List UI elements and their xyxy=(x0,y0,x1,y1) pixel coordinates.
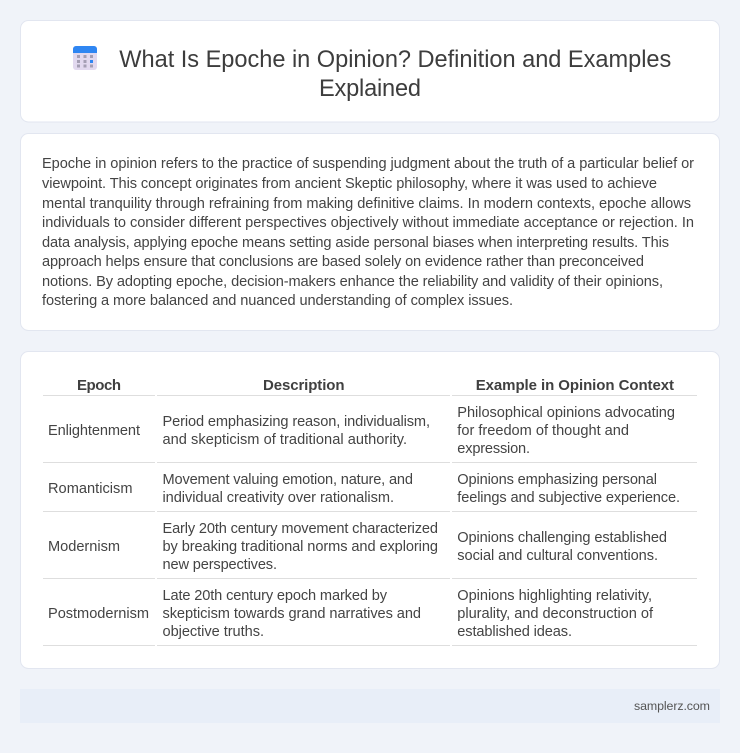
table row: Enlightenment: and skepticism of traditional authority. xyxy=(162,432,407,448)
text block: definition xyxy=(42,156,694,309)
table row: Romanticism: Romanticism xyxy=(48,481,132,497)
text block: definition: notions. By adopting epoche, decision-makers enhance the reliability and validity of their opinions, xyxy=(42,274,663,290)
table row: Modernism: Modernism xyxy=(48,539,120,555)
table row: Postmodernism: plurality, and deconstruction of xyxy=(457,606,654,622)
text block: definition: fostering a more balanced and nuanced understanding of complex issues. xyxy=(42,293,513,309)
title: Explained xyxy=(319,76,421,102)
icon: calendar xyxy=(73,46,97,70)
panel: definition paragraph xyxy=(20,134,720,330)
table row: Postmodernism: objective truths. xyxy=(162,624,264,640)
footer bar xyxy=(20,689,720,723)
table row: Romanticism: Movement valuing emotion, nature, and xyxy=(162,472,413,488)
table row: Romanticism: feelings and subjective experience. xyxy=(457,490,680,506)
text block: definition: mental tranquility through refraining from making definitive claims. In modern contexts, epoche allows xyxy=(42,196,691,212)
table row: Modernism: social and cultural conventions. xyxy=(457,548,658,564)
text block: definition: approach helps ensure that conclusions are based solely on evidence rather than preconceived xyxy=(42,254,644,270)
table row: Enlightenment xyxy=(43,405,697,463)
text block: definition: individuals to consider different perspectives objectively without immediate acceptance or rejection. In xyxy=(42,215,694,231)
table row: Enlightenment: Enlightenment xyxy=(48,423,140,439)
table row: Postmodernism xyxy=(43,588,697,646)
table row: Enlightenment: for freedom of thought and xyxy=(457,423,629,439)
text block: definition: viewpoint. This concept originates from ancient Skeptic philosophy, where it was used to achieve xyxy=(42,176,657,192)
table row: Modernism: Early 20th century movement characterized xyxy=(162,521,438,537)
header panel xyxy=(20,20,720,122)
footer source text: samplerz.com xyxy=(634,699,710,713)
table header row xyxy=(43,377,697,396)
table header row: Example in Opinion Context xyxy=(476,377,674,394)
table row: Modernism: by breaking traditional norms and exploring xyxy=(162,539,438,555)
table row: Romanticism: Opinions emphasizing personal xyxy=(457,472,657,488)
table row: Postmodernism: established ideas. xyxy=(457,624,572,640)
table header row: Description xyxy=(263,377,344,394)
text block: definition: Epoche in opinion refers to the practice of suspending judgment about the truth of a particular belief or xyxy=(42,156,694,172)
table row: Postmodernism: Postmodernism xyxy=(48,606,149,622)
table row: Modernism: Opinions challenging established xyxy=(457,530,667,546)
table row: Postmodernism: Late 20th century epoch marked by xyxy=(162,588,388,604)
table row: Enlightenment: expression. xyxy=(457,441,530,457)
table row: Romanticism xyxy=(43,472,697,512)
text block: definition: data analysis, applying epoche means setting aside personal biases when interpreting results. This xyxy=(42,235,669,251)
title xyxy=(119,47,671,102)
table row: Postmodernism: skepticism towards grand narratives and xyxy=(162,606,421,622)
table row: Romanticism: individual creativity over rationalism. xyxy=(162,490,394,506)
table row: Modernism xyxy=(43,521,697,579)
table row: Enlightenment: Philosophical opinions advocating xyxy=(457,405,675,421)
panel: epoch table xyxy=(20,352,720,668)
table row: Modernism: new perspectives. xyxy=(162,557,277,573)
title: What Is Epoche in Opinion? Definition and Examples xyxy=(119,47,671,73)
table header row: Epoch xyxy=(77,377,121,394)
table row: Postmodernism: Opinions highlighting relativity, xyxy=(457,588,652,604)
table row: Enlightenment: Period emphasizing reason, individualism, xyxy=(162,414,430,430)
